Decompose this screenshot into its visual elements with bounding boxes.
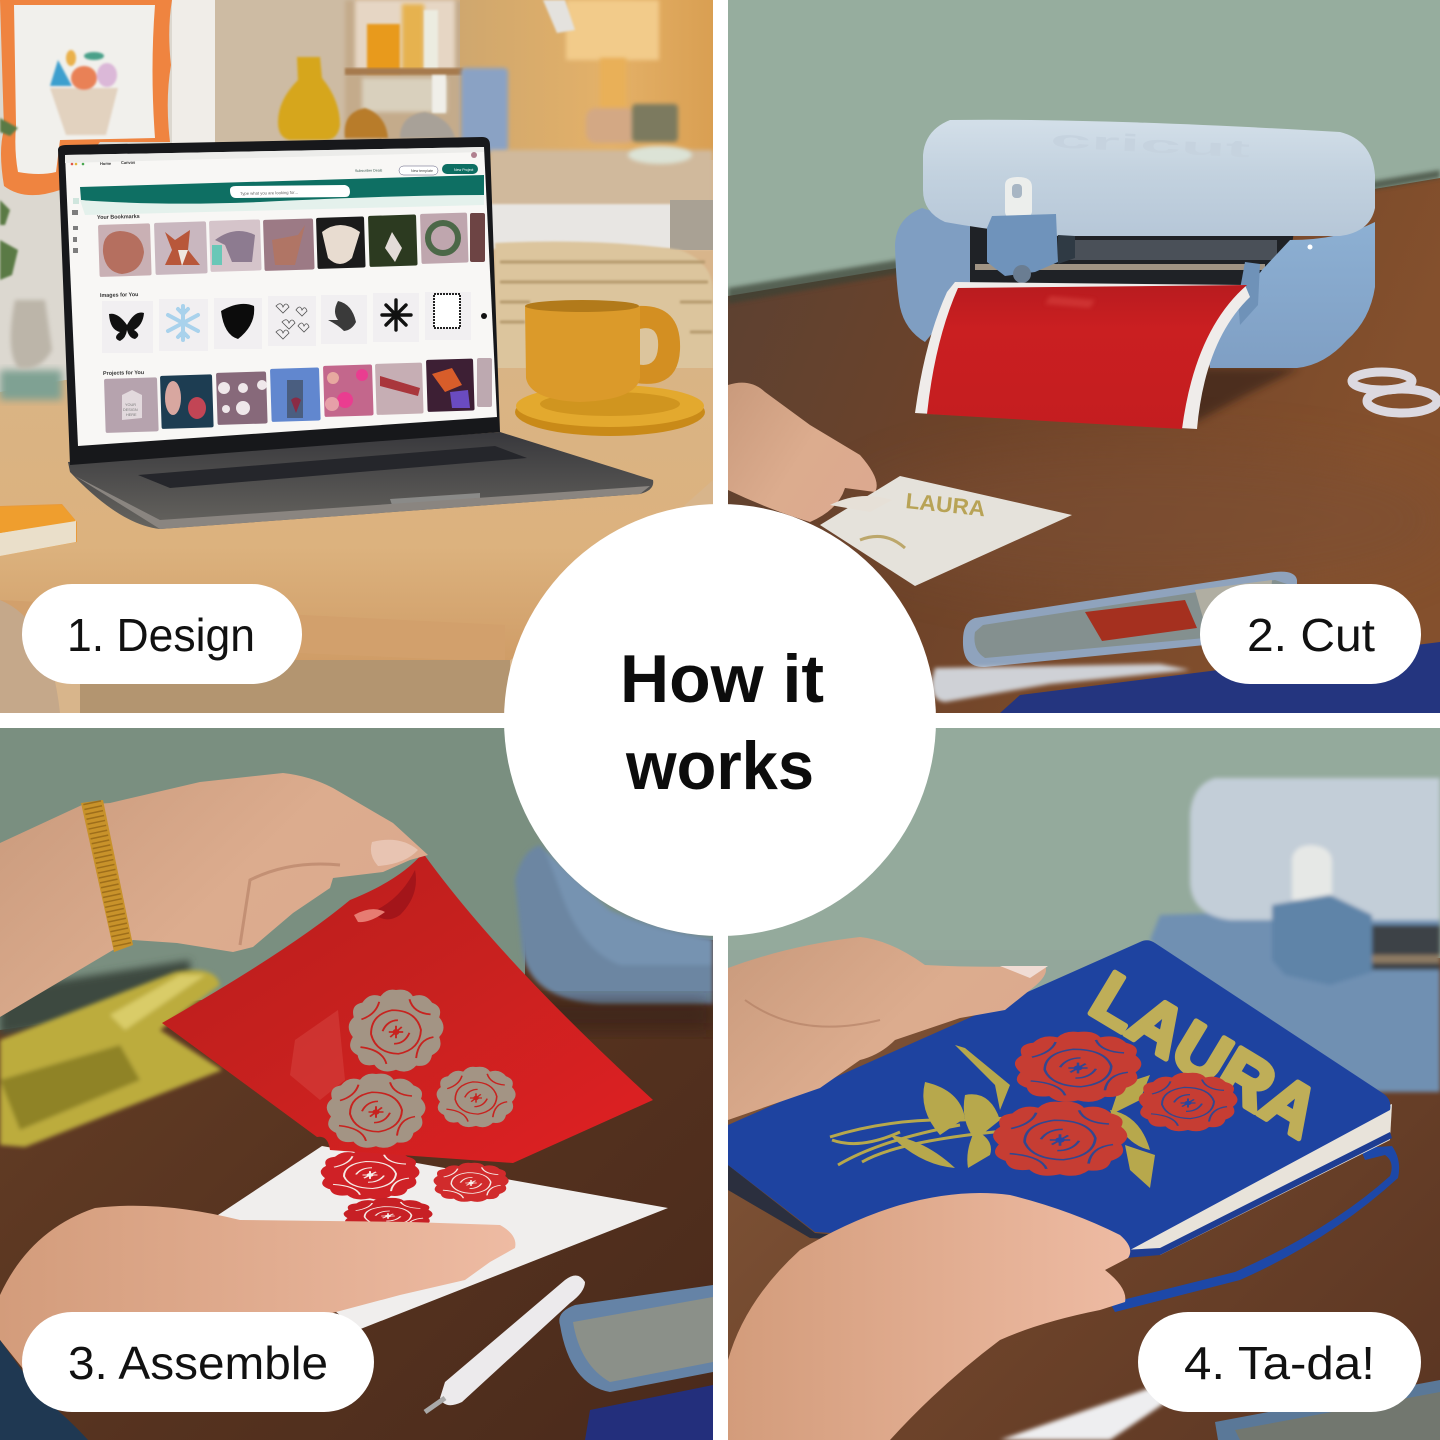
- laptop base: [68, 432, 653, 529]
- panel: 2. Cut photo: [728, 0, 1440, 713]
- framed picture: [0, 0, 172, 195]
- app top bar: Canvas: [121, 160, 136, 165]
- lower hand: [728, 1193, 1130, 1440]
- machine lid: [923, 120, 1375, 236]
- scissors: [1352, 372, 1437, 413]
- stylus: [1000, 1387, 1172, 1440]
- blue notebook: [1000, 642, 1440, 713]
- paper with LAURA decal: LAURA: [904, 488, 987, 521]
- label: 2. Cut: 2. Cut: [1247, 609, 1375, 661]
- section: projects for you: DESIGN: [123, 408, 138, 412]
- upper hand: [0, 773, 428, 1017]
- section: projects for you: HERE: [126, 413, 137, 417]
- section: projects for you: Projects for You: [103, 370, 144, 377]
- green sofa: [0, 728, 713, 1030]
- stylus pen: [425, 1275, 585, 1412]
- label: 2. Cut: [1200, 584, 1421, 684]
- orange notebook: [0, 504, 77, 556]
- teal banner with search: [80, 175, 484, 215]
- wooden table: [0, 368, 713, 665]
- icon: stamp frame: [434, 294, 460, 328]
- denim sleeve: [0, 1340, 88, 1440]
- yellow mug and saucer: [515, 300, 705, 436]
- app top bar: Subscriber Deals: [355, 168, 383, 173]
- blue machine blurred: [515, 845, 713, 1004]
- app top bar: [65, 147, 484, 175]
- phone: [963, 572, 1297, 667]
- machine interior: [970, 225, 1295, 290]
- icon: snowflake: [168, 306, 198, 340]
- ribbon: [1110, 1146, 1399, 1312]
- lower hand: [0, 1206, 515, 1390]
- label: 1. Design: 1. Design: [67, 609, 255, 661]
- label: 4. Ta-da!: [1138, 1312, 1421, 1412]
- section: your bookmarks: Your Bookmarks: [97, 214, 140, 221]
- blurred machine: [1150, 778, 1440, 1092]
- cover title: LAURA: [1078, 957, 1333, 1153]
- machine shadow: [1190, 368, 1300, 425]
- icon: hearts pattern: [276, 304, 309, 339]
- panel: 3. Assemble photo: [0, 728, 713, 1440]
- machine right body: [1205, 222, 1375, 368]
- label: 4. Ta-da!: 4. Ta-da!: [1184, 1337, 1375, 1389]
- mat: liner and red vinyl: [915, 282, 1250, 429]
- section: projects for you: YOUR: [125, 403, 136, 407]
- laptop lid: [58, 137, 500, 465]
- lid logo: cricut: [1050, 126, 1251, 163]
- red vinyl sheet: [162, 853, 653, 1163]
- hand: [728, 383, 877, 522]
- notebook: [728, 940, 1399, 1312]
- red flowers on sheet: [321, 1149, 420, 1200]
- blue notebook: [585, 1385, 713, 1440]
- gold leaves: [830, 1045, 1155, 1188]
- section: images for you: Images for You: [100, 292, 138, 299]
- white backing sheet: [218, 1146, 668, 1330]
- app top bar: New Project: [454, 168, 473, 172]
- picture contents: [50, 50, 118, 135]
- upper hand: [728, 937, 1046, 1120]
- pages: [1110, 1104, 1392, 1255]
- yellow roll: [0, 970, 222, 1147]
- section: images for you: [100, 292, 487, 342]
- spine edge: [728, 1165, 1130, 1260]
- silver teapot: [11, 300, 52, 369]
- machine left wing: [895, 208, 970, 342]
- label: 1. Design: [22, 584, 302, 684]
- plant at left edge: [0, 118, 18, 280]
- icon: butterfly side: [328, 301, 356, 331]
- app top bar: New template: [411, 169, 433, 173]
- section: projects for you: [103, 358, 492, 433]
- section: your bookmarks: [97, 213, 485, 277]
- icon: butterfly: [109, 312, 144, 341]
- sidebar: [72, 198, 79, 253]
- label: 3. Assemble: 3. Assemble: [68, 1337, 328, 1389]
- title text: How it: [620, 641, 824, 717]
- pen: [932, 664, 1190, 702]
- green sofa: [728, 0, 1440, 296]
- phone corner: [1215, 1380, 1440, 1440]
- tool carriage: [987, 177, 1075, 283]
- teal banner with search: Type what you are looking for...: [240, 190, 298, 196]
- icon: black snowflake: [382, 300, 411, 330]
- app top bar: Home: [100, 161, 112, 166]
- room background wall: [0, 0, 713, 400]
- foil flowers on vinyl: [349, 990, 444, 1072]
- title text: works: [625, 728, 814, 804]
- laptop: [58, 137, 653, 529]
- yellow vase: [278, 57, 340, 140]
- gold bracelet: [81, 800, 133, 952]
- paper with LAURA decal: [820, 476, 1072, 586]
- icon: monstera leaf: [221, 304, 254, 339]
- panel: 1. Design photo: [0, 0, 713, 713]
- table sheen: [850, 450, 1440, 590]
- red flowers: [1015, 1032, 1141, 1102]
- label: 3. Assemble: [22, 1312, 374, 1412]
- laptop screen: [65, 147, 497, 446]
- rattan chair: [495, 242, 713, 372]
- cutting machine: [895, 120, 1375, 368]
- phone: [559, 1285, 713, 1392]
- green sofa: [728, 728, 1440, 958]
- cover: [728, 940, 1390, 1250]
- center circle title: [504, 504, 936, 936]
- panel: 4. Ta-da! photo: [728, 728, 1440, 1440]
